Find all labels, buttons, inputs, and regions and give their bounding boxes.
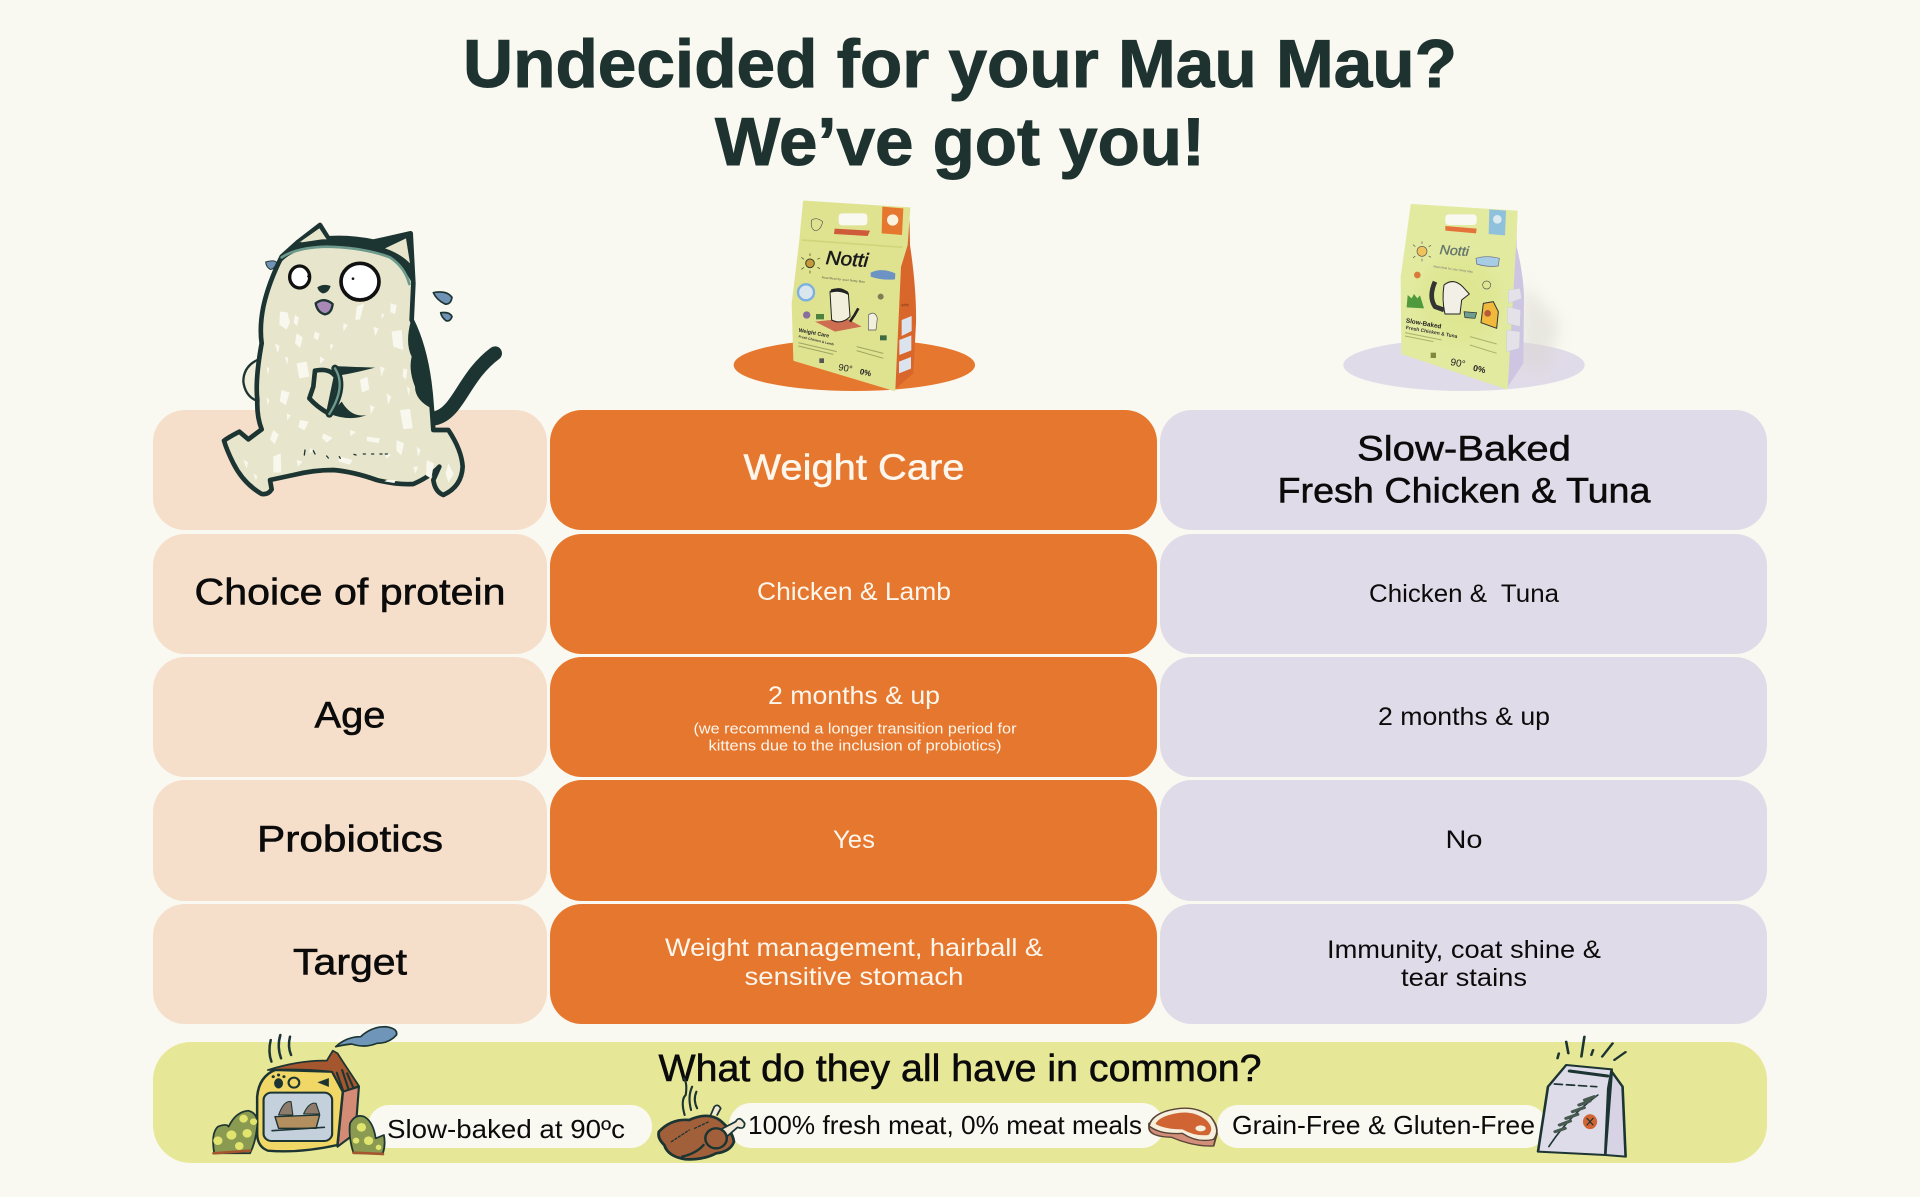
Slow-Baked column text: Fresh Chicken & Tuna	[1278, 472, 1651, 510]
Slow-Baked column text	[1278, 430, 1651, 992]
row label text: Probiotics	[257, 818, 443, 860]
row label text: Choice of protein	[194, 572, 506, 612]
icon: raw steak	[1149, 1108, 1217, 1146]
Weight Care column text: Chicken & Lamb	[757, 578, 951, 606]
Weight Care column text: Weight management, hairball &	[665, 934, 1043, 962]
product: Weight Care bag: Fresh Chicken & Lamb	[798, 334, 834, 346]
title: We’ve got you!	[715, 104, 1205, 180]
icon: roast chicken	[659, 1078, 745, 1159]
pill: grain free	[1217, 1105, 1547, 1148]
cat paw	[309, 366, 375, 418]
product: Slow-Baked bag: 90°	[1449, 357, 1466, 371]
title	[463, 26, 1457, 180]
cat fur specks	[243, 303, 454, 483]
Slow-Baked column text: Immunity, coat shine &	[1327, 936, 1601, 964]
pill: fresh meat	[729, 1103, 1164, 1148]
Slow-Baked column text: Chicken & Tuna	[1369, 580, 1559, 608]
Slow-Baked column text: Slow-Baked	[1357, 430, 1571, 468]
Weight Care column text: kittens due to the inclusion of probiotics)	[708, 738, 1002, 754]
product: Weight Care bag: 0%	[859, 367, 872, 378]
Weight Care column text: (we recommend a longer transition period for	[694, 720, 1016, 738]
Weight Care column text: Weight Care	[744, 446, 964, 488]
product: Slow-Baked bag	[1343, 205, 1585, 391]
Weight Care column text: 2 months & up	[768, 682, 940, 710]
icon: grain-free bag	[1538, 1037, 1626, 1157]
row label text: Age	[314, 694, 386, 736]
heading: what they have in common: What do they all have in common?	[658, 1048, 1262, 1090]
pill: slow-baked: Slow-baked at 90ºc	[387, 1114, 625, 1144]
product: Slow-Baked bag: 0%	[1472, 363, 1487, 375]
icon: oven with mitts	[213, 1027, 397, 1154]
product: Slow-Baked bag: Real Meal for your Notty Mau	[1433, 264, 1474, 274]
row label text	[194, 572, 506, 982]
pill: slow-baked	[368, 1105, 652, 1148]
product: Slow-Baked bag: Notti	[1439, 242, 1471, 259]
product: Weight Care bag: Why	[901, 303, 909, 308]
panel: common traits band	[153, 1042, 1767, 1163]
product: Slow-Baked bag: Fresh Chicken & Tuna	[1405, 325, 1458, 340]
panel: Weight Care column	[550, 410, 1157, 1024]
product: Weight Care bag: Weight Care	[798, 328, 830, 340]
product: Slow-Baked bag: Slow-Baked	[1405, 317, 1442, 331]
pill: grain free: Grain-Free & Gluten-Free	[1232, 1110, 1535, 1140]
product: Weight Care bag: 90°	[838, 362, 854, 374]
product: Weight Care bag: Real Meal for your Notty Mau	[822, 275, 865, 284]
panel: Slow-Baked column	[1160, 410, 1767, 1024]
panel: row labels column	[153, 410, 547, 1024]
Slow-Baked column text: tear stains	[1401, 964, 1527, 992]
row label text: Target	[293, 942, 408, 982]
title: Undecided for your Mau Mau?	[463, 26, 1457, 102]
pill: fresh meat: 100% fresh meat, 0% meat meals	[748, 1110, 1142, 1140]
product: Weight Care bag	[734, 202, 975, 391]
Weight Care column text	[665, 446, 1043, 991]
Slow-Baked column text: No	[1446, 826, 1482, 854]
product: Weight Care bag: Notti	[825, 248, 870, 272]
Slow-Baked column text: 2 months & up	[1378, 703, 1550, 731]
Weight Care column text: sensitive stomach	[744, 963, 964, 991]
icon: cat mascot	[224, 225, 495, 495]
Weight Care column text: Yes	[833, 826, 875, 854]
